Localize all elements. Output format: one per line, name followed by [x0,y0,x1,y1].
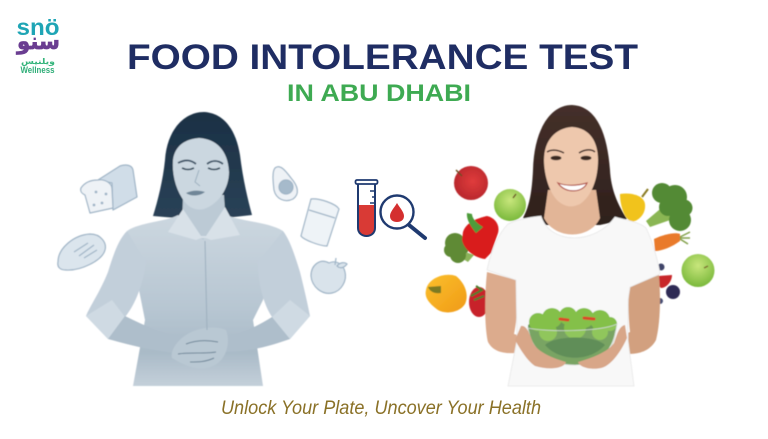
icon: berries [657,264,680,304]
white t-shirt [487,216,660,386]
right arm [612,275,660,354]
icon: small broccoli [444,233,474,263]
icon: red bell pepper [462,213,499,259]
title: FOOD INTOLERANCE TEST [127,37,638,77]
icon: glass of milk [301,199,339,246]
icon: avocado [273,167,297,201]
icon: carrot [654,232,690,251]
blouse placket [205,241,207,330]
logo latin wordmark: snö [16,14,60,40]
icon: apple [311,258,347,293]
subtitle: IN ABU DHABI [287,80,471,107]
icon: test tube and magnifier [356,180,425,238]
hands [515,325,627,369]
icon: yellow squash [620,189,648,222]
face [173,138,229,210]
tagline: Unlock Your Plate, Uncover Your Health [221,397,541,419]
blouse body [127,215,283,386]
icon: large broccoli [646,183,692,231]
figure: smiling woman with salad bowl [485,105,660,386]
hair [153,112,252,218]
logo: Sno Wellness [16,14,60,75]
icon: bread loaf [81,165,137,213]
forearms [108,316,290,353]
hands [172,328,228,369]
right sleeve [258,231,310,339]
illustration: happy woman with fresh foods [426,105,714,386]
collar [168,207,240,240]
figure: woman holding stomach [86,112,310,386]
neck [544,190,600,234]
test tube [356,180,378,236]
left arm [485,272,532,353]
magnifying glass [380,196,425,238]
icon: green apple [494,189,526,221]
icon: tomato [469,286,489,317]
neck [182,195,226,243]
sleeve cuffs [86,300,310,339]
salad bowl [528,307,617,365]
logo arabic wordmark: سنو [16,29,60,55]
logo arabic subline: ويلنيس [21,57,55,67]
hair [523,105,627,225]
left sleeve [86,231,146,339]
icon: round bread [58,234,105,270]
icon: green apple right [682,254,714,287]
logo wellness label: Wellness [20,65,54,75]
icon: red apple [454,166,488,200]
icon: yellow bell pepper [426,275,467,312]
illustration: bloated woman with trigger foods [58,112,347,386]
face [544,127,598,206]
